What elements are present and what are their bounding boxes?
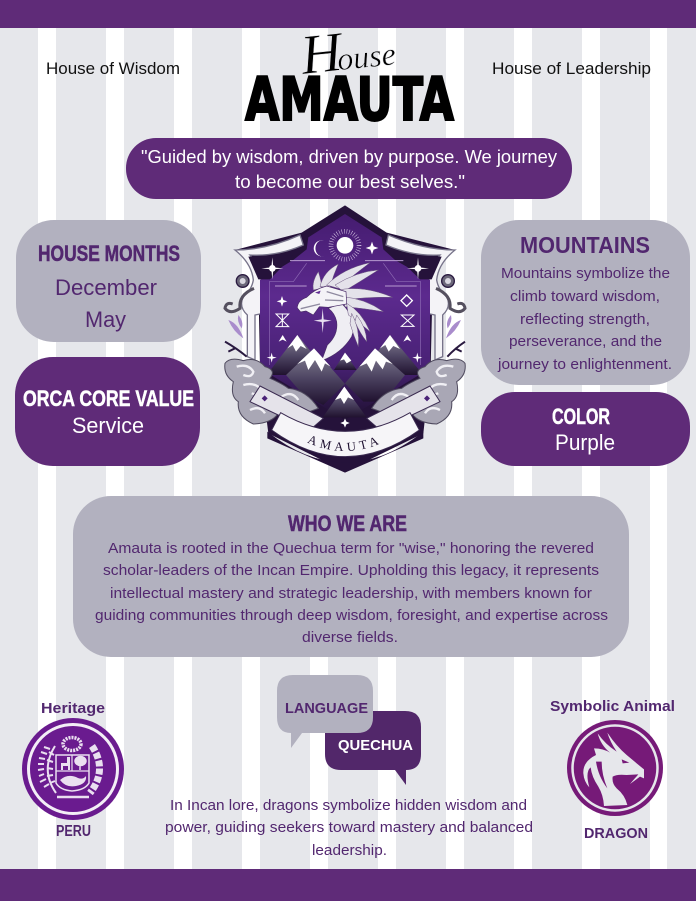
emblem vicuna (61, 757, 70, 770)
emblem palm (38, 746, 56, 793)
crest dragon neck (322, 303, 354, 361)
symbolic animal label: Symbolic Animal (550, 698, 675, 715)
bottom bar (0, 869, 696, 901)
lore text: In Incan lore, dragons symbolize hidden wisdom and (170, 798, 527, 814)
lore text: power, guiding seekers toward mastery and balanced (165, 820, 533, 836)
panel: who we are: guiding communities through deep wisdom, foresight, and expertise across (95, 608, 608, 624)
panel: orca core value: Service (72, 413, 144, 438)
panel: mountains: reflecting strength, (520, 312, 650, 328)
panel: who we are: diverse fields. (302, 630, 398, 646)
crest clouds (225, 359, 465, 424)
panel: color: Purple (555, 430, 615, 455)
icon: dragon emblem (567, 720, 663, 816)
left tagline: House of Wisdom (46, 59, 180, 78)
language bubble (277, 675, 373, 748)
panel: house months (16, 220, 201, 342)
crest banner (249, 385, 441, 473)
panel: who we are: scholar-leaders of the Incan Empire. Upholding this legacy, it represents (103, 563, 599, 579)
crest shield backing (235, 205, 455, 472)
peru label: PERU (56, 823, 91, 840)
emblem wreath (63, 738, 81, 750)
heritage label: Heritage (41, 700, 105, 717)
panel: mountains: climb toward wisdom, (510, 289, 660, 305)
quechua bubble (325, 711, 421, 785)
quechua label: QUECHUA (338, 737, 413, 754)
emblem tree (75, 756, 86, 770)
title (245, 15, 454, 135)
lore text: leadership. (312, 843, 387, 859)
panel: mountains (481, 220, 690, 385)
panel: mountains: Mountains symbolize the (501, 266, 670, 282)
top bar (0, 0, 696, 28)
crest moon, sun and stars (261, 231, 429, 363)
panel: orca core value (15, 357, 200, 466)
crest side scrolls (225, 235, 465, 360)
right tagline: House of Leadership (492, 59, 651, 78)
emblem ribbon (57, 796, 89, 798)
crest dragon head and mane (297, 263, 393, 347)
house name: AMAUTA (245, 65, 454, 135)
panel: who we are (73, 496, 629, 657)
panel: who we are: WHO WE ARE (288, 511, 407, 536)
quote pill: "Guided by wisdom, driven by purpose. We journey (141, 147, 557, 167)
panel: house months: HOUSE MONTHS (38, 241, 180, 266)
crest purple field (260, 214, 430, 420)
emblem cornucopia (60, 776, 86, 786)
language label: LANGUAGE (285, 700, 368, 717)
crest mountains (267, 335, 423, 428)
quote pill (126, 138, 572, 199)
dragon head (583, 733, 644, 806)
panel: mountains: MOUNTAINS (520, 232, 650, 258)
panel: house months: May (85, 307, 126, 332)
panel: orca core value: ORCA CORE VALUE (23, 386, 194, 411)
crest field frame lines (269, 263, 421, 365)
emblem laurel (90, 746, 100, 793)
crest leaves (225, 315, 465, 357)
crest banner name: AMAUTA (307, 436, 380, 451)
crest cloud swirls (237, 366, 453, 413)
lore text (165, 798, 533, 859)
crest dark corners (248, 255, 442, 279)
panel: mountains: journey to enlightenment. (497, 357, 672, 373)
icon: peru emblem (22, 718, 124, 820)
panel: color (481, 392, 690, 466)
panel: color: COLOR (552, 404, 610, 429)
quote pill: to become our best selves." (235, 172, 465, 192)
house crest (223, 205, 467, 473)
script word: House (297, 15, 398, 87)
speech bubbles (277, 675, 421, 785)
dragon label: DRAGON (584, 825, 648, 842)
panel: who we are: Amauta is rooted in the Quechua term for "wise," honoring the revered (108, 541, 594, 557)
panel: house months: December (55, 275, 157, 300)
panel: who we are: intellectual mastery and strategic leadership, with members known for (110, 586, 592, 602)
emblem shield (56, 755, 89, 791)
panel: mountains: perseverance, and the (509, 334, 662, 350)
